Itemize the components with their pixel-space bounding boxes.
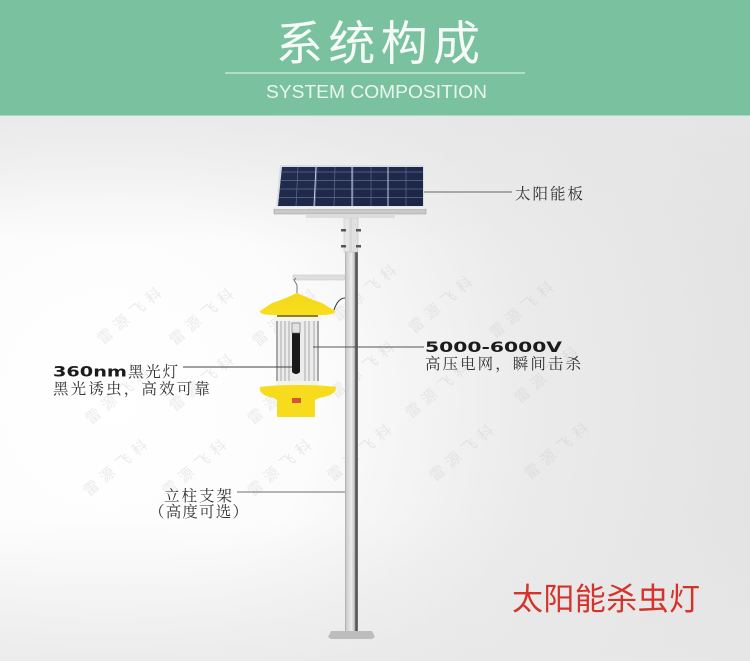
- watermarks: [80, 258, 597, 500]
- watermarks: 雷源飞科: [166, 348, 242, 415]
- watermarks: 雷源飞科: [80, 433, 156, 500]
- watermarks: 雷源飞科: [327, 335, 403, 402]
- label: solar panel: 太阳能板: [515, 185, 583, 203]
- lamp body: [274, 316, 321, 387]
- lamp post product: [260, 165, 426, 639]
- label: pole support: [149, 487, 248, 521]
- label: high voltage grid: 5000-6000V: [425, 340, 563, 356]
- lamp roof: [260, 293, 335, 315]
- watermarks: 雷源飞科: [159, 433, 235, 500]
- watermarks: 雷源飞科: [426, 418, 502, 485]
- watermarks: 雷源飞科: [402, 355, 478, 422]
- watermarks: 雷源飞科: [486, 275, 562, 342]
- watermarks: 雷源飞科: [244, 361, 320, 428]
- insect killer lamp: [260, 293, 336, 417]
- watermarks: 雷源飞科: [244, 433, 320, 500]
- solar panel: [274, 165, 426, 218]
- label: black light: 黑光诱虫，高效可靠: [53, 379, 210, 398]
- watermarks: 雷源飞科: [405, 270, 481, 337]
- title: 系统构成: [276, 17, 480, 70]
- watermarks: 雷源飞科: [324, 418, 400, 485]
- label: black light: [53, 363, 210, 398]
- lamp arm: [293, 275, 345, 310]
- lamp base: [260, 385, 336, 417]
- leader lines: [183, 192, 512, 492]
- watermarks: 雷源飞科: [166, 282, 242, 349]
- label: pole support: （高度可选）: [149, 502, 248, 521]
- label: black light: 黑光灯: [128, 363, 178, 381]
- watermarks: 雷源飞科: [82, 361, 158, 428]
- watermarks: 雷源飞科: [521, 416, 597, 483]
- watermarks: 雷源飞科: [329, 258, 405, 325]
- label: high voltage grid: [425, 340, 581, 373]
- label: high voltage grid: 高压电网，瞬间击杀: [425, 354, 581, 373]
- base plate: [328, 631, 375, 639]
- watermarks: 雷源飞科: [94, 281, 170, 348]
- watermarks: 雷源飞科: [511, 340, 587, 407]
- pole: [345, 250, 358, 632]
- header banner: [0, 0, 750, 116]
- label: pole support: 立柱支架: [164, 487, 232, 505]
- pole bracket: [341, 218, 361, 252]
- black light tube: [292, 332, 300, 374]
- label: black light: 360nm: [53, 364, 127, 380]
- subtitle: SYSTEM COMPOSITION: [266, 82, 487, 102]
- product name: 太阳能杀虫灯: [512, 582, 700, 617]
- watermarks: 雷源飞科: [249, 283, 325, 350]
